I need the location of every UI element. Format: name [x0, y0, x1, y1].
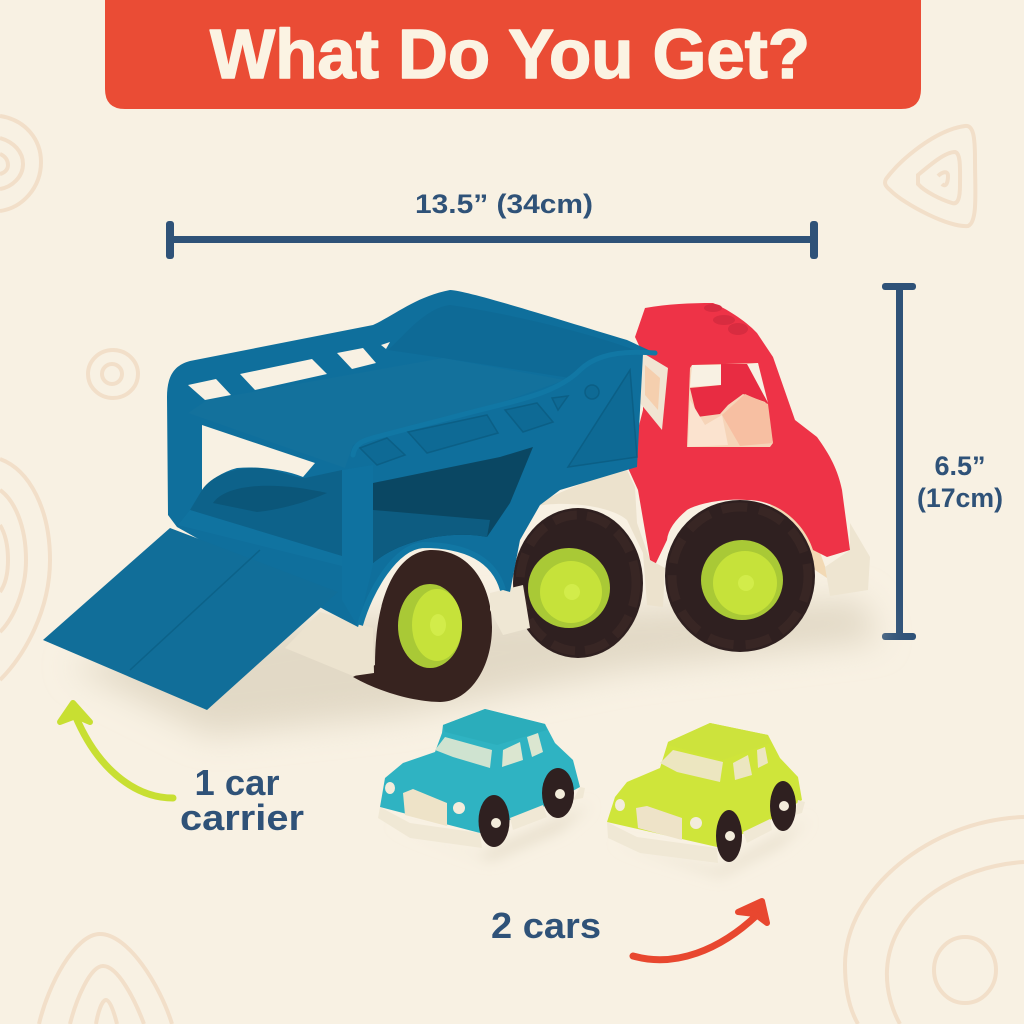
label: 1 car carrier: [180, 762, 304, 838]
height dimension: (17cm): [917, 483, 1003, 513]
green car: [607, 723, 808, 876]
decorative swirl: left edge: [0, 459, 50, 680]
side panel details: [360, 370, 637, 467]
cab side window: [640, 353, 668, 430]
height dimension: [882, 283, 1003, 640]
label: 1 car carrier: 1 car: [194, 762, 280, 803]
arrow: green to carrier: [60, 703, 173, 798]
lip rail: [353, 352, 655, 455]
rear wheel: [353, 550, 492, 702]
gap under deck: [202, 425, 315, 490]
middle post: [342, 465, 373, 627]
car carrier truck toy: [43, 290, 880, 735]
middle wheel: [513, 508, 643, 658]
label: 1 car carrier: carrier: [180, 797, 304, 838]
cab roof lights: [704, 304, 748, 335]
green car shadow: [612, 820, 808, 876]
title banner: [105, 0, 921, 109]
decorative swirl: bottom right: [845, 817, 1024, 1024]
cab front window: [687, 363, 773, 447]
width dimension: [166, 189, 818, 259]
arrow: red to cars: [633, 901, 767, 960]
front wheel: [665, 500, 815, 652]
wheel arch rim: [360, 545, 503, 625]
blue car: [378, 709, 590, 860]
lower deck: [190, 468, 342, 560]
decorative swirl: top left: [0, 116, 41, 211]
cream middle block: [490, 585, 530, 635]
side opening: [373, 447, 533, 563]
cream front bumper: [825, 523, 870, 596]
cream rear chassis: [533, 470, 665, 607]
label: 2 cars: 2 cars: [491, 905, 601, 946]
decorative swirl: bottom left: [39, 934, 172, 1024]
upper deck surface: [188, 358, 565, 468]
blue car shadow: [385, 805, 590, 860]
upper deck back wall: [388, 305, 635, 378]
decorative swirl: middle left circle: [88, 350, 138, 398]
decorative swirl: top right triangle: [885, 126, 975, 226]
rail windows: [188, 342, 390, 400]
width dimension: 13.5” (34cm): [415, 189, 593, 219]
ramp: [43, 528, 338, 710]
cream rear block: [285, 612, 374, 676]
carrier body: [167, 290, 655, 627]
title: What Do You Get?: [210, 15, 810, 93]
cab: [628, 303, 850, 565]
inner fender: [765, 495, 830, 580]
height dimension: 6.5”: [934, 451, 986, 481]
truck shadow: [70, 600, 880, 735]
